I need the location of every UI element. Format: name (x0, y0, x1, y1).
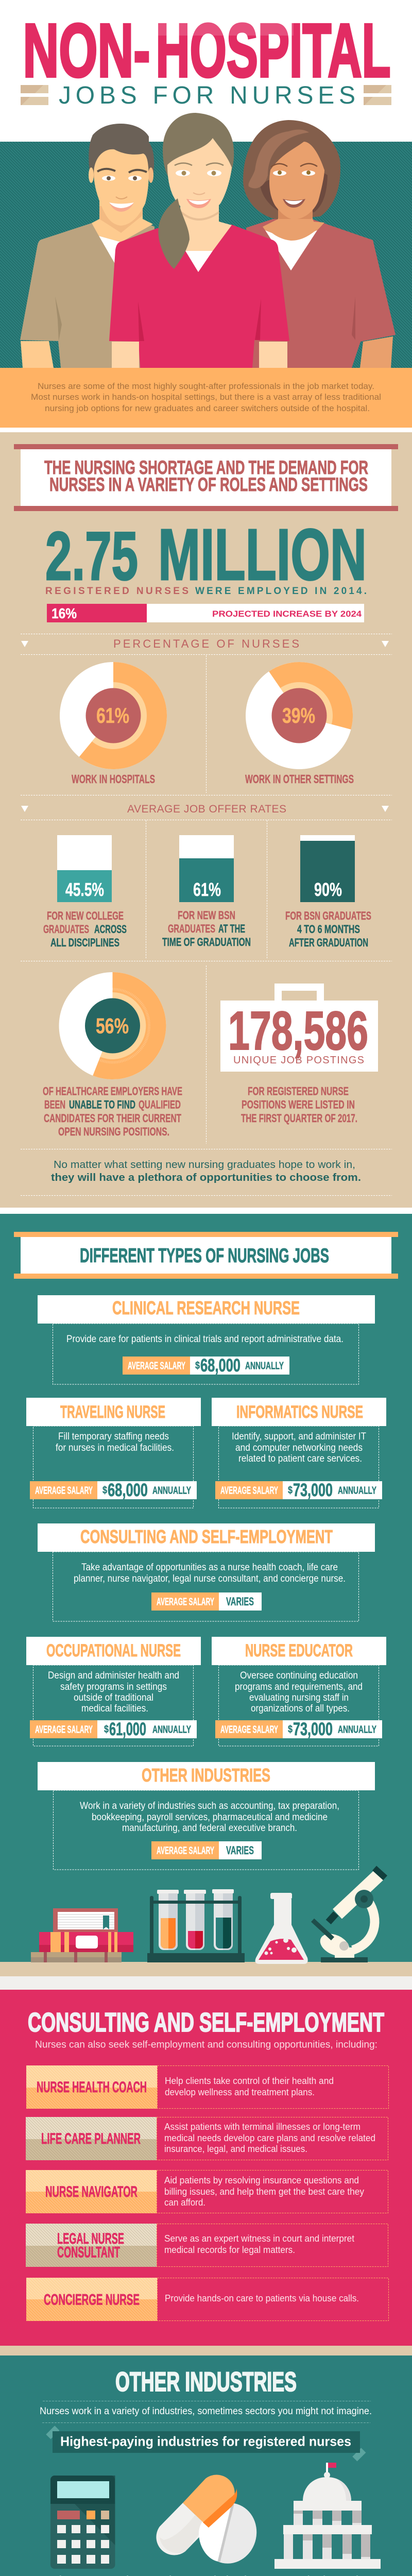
icon: flask (255, 1893, 308, 1964)
intro text: nursing job options for new graduates and career switchers outside of the hospital. (45, 403, 370, 413)
card: informatics nurse: $ (288, 1485, 293, 1496)
role: legal nurse consultant: medical records for legal matters. (164, 2245, 295, 2255)
section heading: nursing shortage (14, 444, 398, 511)
card: other industries: manufacturing, and federal executive branch. (122, 1823, 297, 1834)
bar: 45.5% new college graduates (43, 835, 127, 949)
progress bar: projected increase (47, 604, 364, 622)
card: nurse educator: programs and requirements, and (235, 1682, 363, 1692)
bar: 90% BSN graduates after 4 to 6 months: FOR BSN GRADUATES (285, 909, 371, 922)
card: clinical research nurse: AVERAGE SALARY (128, 1360, 185, 1371)
role: concierge nurse: CONCIERGE NURSE (44, 2292, 140, 2308)
donut chart: 39% work in other settings: WORK IN OTHER SETTINGS (245, 772, 354, 786)
subheading: percentage of nurses (21, 634, 392, 654)
subheading: average job offer rates: AVERAGE JOB OFFER RATES (127, 803, 286, 815)
bar: 61% new BSN graduates: FOR NEW BSN (178, 909, 235, 922)
donut chart: 56% of healthcare employers: OF HEALTHCARE EMPLOYERS HAVE (43, 1085, 182, 1097)
big stat: 2.75 million: 2.75 (45, 518, 138, 595)
donut chart: 56% of healthcare employers: CANDIDATES FOR THEIR CURRENT (44, 1112, 181, 1125)
card: consulting and self-employment: VARIES (226, 1595, 254, 1608)
role: nurse navigator: billing issues, and help them get the best care they (164, 2187, 364, 2197)
role: life care planner: medical needs develop care plans and resolve related (164, 2133, 375, 2143)
card: clinical research nurse: 68,000 (200, 1355, 241, 1376)
icon: government building (274, 2463, 381, 2569)
card: other industries (38, 1762, 375, 1870)
icon: microscope (313, 1868, 385, 1962)
role: life care planner: LIFE CARE PLANNER (41, 2130, 141, 2147)
title: NON- (23, 8, 150, 93)
bar: 90% BSN graduates after 4 to 6 months: 4 TO 6 MONTHS (297, 923, 360, 936)
section heading: other industries: Nurses work in a variety of industries, sometimes sectors you might not imagine. (40, 2406, 372, 2417)
illustration: female nurse center (109, 113, 289, 368)
card: occupational nurse: Design and administer health and (48, 1670, 179, 1681)
closing statement for shortage section: they will have a plethora of opportunities to choose from. (51, 1172, 361, 1183)
donut chart: 39% work in other settings (245, 662, 354, 786)
briefcase: 178,586 unique job postings: THE FIRST QUARTER OF 2017. (241, 1112, 357, 1125)
icon: calculator (50, 2476, 115, 2569)
card: consulting and self-employment: Take advantage of opportunities as a nurse health coach, life care (81, 1562, 338, 1573)
role: life care planner: Assist patients with terminal illnesses or long-term (164, 2122, 360, 2132)
role: nurse navigator (26, 2170, 388, 2213)
big stat: 2.75 million (45, 514, 367, 595)
card: nurse educator: evaluating nursing staff in (249, 1692, 349, 1703)
section heading: consulting and self-employment (28, 2008, 384, 2050)
progress bar: projected increase: 16% (52, 605, 77, 621)
card: occupational nurse: AVERAGE SALARY (35, 1724, 93, 1735)
card: other industries: OTHER INDUSTRIES (142, 1765, 270, 1786)
role: life care planner (26, 2117, 388, 2160)
card: occupational nurse: 61,000 (109, 1719, 146, 1739)
card: clinical research nurse: Provide care for patients in clinical trials and report administrative data. (66, 1334, 344, 1345)
briefcase: 178,586 unique job postings: UNIQUE JOB POSTINGS (233, 1055, 364, 1066)
title (23, 8, 390, 93)
card: traveling nurse: for nurses in medical facilities. (56, 1443, 174, 1453)
card: other industries: Work in a variety of industries such as accounting, tax preparation, (80, 1801, 339, 1811)
card: other industries: bookkeeping, payroll services, pharmaceutical and medicine (92, 1812, 328, 1823)
card: occupational nurse: ANNUALLY (152, 1724, 191, 1735)
card: occupational nurse: $ (104, 1724, 109, 1735)
briefcase: 178,586 unique job postings: POSITIONS WERE LISTED IN (242, 1098, 355, 1111)
donut chart: 56% of healthcare employers: OPEN NURSING POSITIONS. (58, 1125, 169, 1138)
banner: highest-paying industries (46, 2426, 366, 2461)
icon: test tubes in rack (147, 1889, 245, 1962)
bar: 61% new BSN graduates: 61% (193, 879, 221, 900)
intro text: Most nurses work in hands-on hospital settings, but there is a vast array of less traditional (31, 392, 381, 402)
donut chart: 61% work in hospitals: WORK IN HOSPITALS (72, 772, 155, 786)
card: traveling nurse: ANNUALLY (152, 1485, 191, 1496)
role: legal nurse consultant: LEGAL NURSE (57, 2230, 124, 2247)
bar: 61% new BSN graduates: AT THE (218, 922, 245, 935)
donut chart: 56% of healthcare employers (43, 972, 182, 1138)
card: nurse educator: 73,000 (293, 1719, 333, 1739)
donut chart: 56% of healthcare employers: BEEN (44, 1098, 65, 1111)
card: informatics nurse: related to patient care services. (238, 1453, 362, 1464)
role: nurse health coach (26, 2065, 388, 2109)
card: nurse educator: AVERAGE SALARY (220, 1724, 278, 1735)
card: occupational nurse: OCCUPATIONAL NURSE (46, 1641, 181, 1660)
card: traveling nurse: 68,000 (108, 1480, 148, 1500)
stat caption: REGISTERED NURSES (45, 586, 188, 597)
role: nurse health coach: NURSE HEALTH COACH (37, 2079, 147, 2096)
donut chart: 56% of healthcare employers: 56% (96, 1014, 129, 1038)
card: clinical research nurse: $ (195, 1360, 200, 1371)
bar: 45.5% new college graduates: 45.5% (65, 879, 104, 900)
bar: 90% BSN graduates after 4 to 6 months: AFTER GRADUATION (289, 936, 368, 949)
section heading: consulting and self-employment: Nurses can also seek self-employment and consulting opportunities, including: (35, 2039, 377, 2050)
donut chart: 61% work in hospitals: 61% (96, 703, 129, 727)
illustration: male nurse (20, 124, 154, 368)
donut chart: 39% work in other settings: 39% (282, 703, 315, 727)
subheading: percentage of nurses: PERCENTAGE OF NURSES (113, 637, 299, 650)
progress bar: projected increase: PROJECTED INCREASE BY 2024 (212, 609, 362, 619)
donut chart: 56% of healthcare employers: QUALIFIED (139, 1098, 181, 1111)
card: consulting and self-employment (38, 1523, 375, 1621)
role: legal nurse consultant (26, 2224, 388, 2267)
icon: pills (156, 2475, 262, 2569)
card: occupational nurse: safety programs in settings (60, 1682, 167, 1692)
card: informatics nurse: 73,000 (293, 1480, 333, 1500)
briefcase: 178,586 unique job postings (220, 984, 378, 1125)
bar: 45.5% new college graduates: GRADUATES (43, 923, 89, 936)
card: informatics nurse: ANNUALLY (338, 1485, 376, 1496)
briefcase: 178,586 unique job postings: FOR REGISTERED NURSE (248, 1085, 349, 1097)
card: other industries: AVERAGE SALARY (157, 1845, 214, 1857)
bar: 61% new BSN graduates: GRADUATES (168, 922, 215, 935)
card: traveling nurse (26, 1398, 201, 1508)
stat caption: WERE EMPLOYED IN 2014. (195, 586, 367, 597)
closing statement for shortage section: No matter what setting new nursing graduates hope to work in, (54, 1159, 355, 1171)
card: nurse educator (212, 1637, 386, 1746)
intro text (31, 381, 381, 413)
card: nurse educator: organizations of all types. (251, 1703, 350, 1714)
section heading: different types of nursing jobs (14, 1232, 398, 1279)
bar: 45.5% new college graduates: FOR NEW COLLEGE (47, 909, 124, 922)
card: informatics nurse: AVERAGE SALARY (220, 1485, 278, 1496)
bar: 61% new BSN graduates (162, 835, 251, 948)
role: nurse navigator: NURSE NAVIGATOR (45, 2183, 138, 2200)
role: nurse navigator: Aid patients by resolving insurance questions and (164, 2175, 359, 2185)
role: nurse health coach: develop wellness and treatment plans. (165, 2087, 315, 2097)
bar: 45.5% new college graduates: ALL DISCIPLINES (50, 936, 119, 949)
bar: 90% BSN graduates after 4 to 6 months: 90% (314, 879, 342, 900)
card: informatics nurse (212, 1398, 386, 1508)
role: nurse navigator: can afford. (164, 2197, 205, 2208)
illustration: female nurse right (243, 120, 396, 368)
bar: 61% new BSN graduates: TIME OF GRADUATION (162, 936, 251, 948)
card: other industries: VARIES (226, 1844, 254, 1857)
icon: stack of books (31, 1908, 133, 1962)
subtitle with decorative stripes: JOBS FOR NURSES (59, 82, 355, 109)
card: clinical research nurse: ANNUALLY (245, 1360, 284, 1371)
card: occupational nurse: outside of traditional (74, 1692, 153, 1703)
card: traveling nurse: $ (102, 1485, 107, 1496)
card: traveling nurse: AVERAGE SALARY (35, 1485, 93, 1496)
section heading: other industries: OTHER INDUSTRIES (115, 2367, 297, 2397)
card: consulting and self-employment: AVERAGE SALARY (157, 1596, 214, 1607)
card: traveling nurse: TRAVELING NURSE (60, 1402, 165, 1422)
card: nurse educator: NURSE EDUCATOR (245, 1641, 353, 1660)
role: life care planner: insurance, legal, and medical issues. (164, 2144, 307, 2154)
card: nurse educator: Oversee continuing education (240, 1670, 358, 1681)
card: nurse educator: ANNUALLY (338, 1724, 376, 1735)
section heading: other industries (40, 2367, 372, 2422)
role: concierge nurse: Provide hands-on care to patients via house calls. (165, 2293, 359, 2303)
card: nurse educator: $ (288, 1724, 293, 1735)
card: occupational nurse (26, 1637, 201, 1746)
card: occupational nurse: medical facilities. (81, 1703, 148, 1714)
card: clinical research nurse (38, 1295, 375, 1384)
banner: highest-paying industries: Highest-paying industries for registered nurses (60, 2434, 351, 2449)
card: clinical research nurse: CLINICAL RESEARCH NURSE (112, 1297, 300, 1318)
donut chart: 61% work in hospitals (60, 662, 167, 786)
card: traveling nurse: Fill temporary staffing needs (58, 1431, 169, 1442)
bar: 90% BSN graduates after 4 to 6 months (285, 835, 371, 949)
role: legal nurse consultant: Serve as an expert witness in court and interpret (164, 2233, 354, 2244)
donut chart: 56% of healthcare employers: UNABLE TO FIND (69, 1098, 135, 1111)
role: legal nurse consultant: CONSULTANT (57, 2244, 120, 2261)
card: informatics nurse: and computer networking needs (235, 1443, 363, 1453)
intro text: Nurses are some of the most highly sought-after professionals in the job market today. (38, 381, 374, 391)
role: nurse health coach: Help clients take control of their health and (165, 2076, 334, 2086)
closing statement for shortage section (51, 1159, 361, 1183)
bar: 45.5% new college graduates: ACROSS (94, 923, 127, 936)
role: concierge nurse (26, 2278, 388, 2321)
stat caption (45, 586, 367, 597)
subheading: average job offer rates (21, 795, 392, 820)
card: informatics nurse: Identify, support, and administer IT (232, 1431, 366, 1442)
card: consulting and self-employment: planner, nurse navigator, legal nurse consultant, and concierge nurse. (74, 1573, 346, 1584)
